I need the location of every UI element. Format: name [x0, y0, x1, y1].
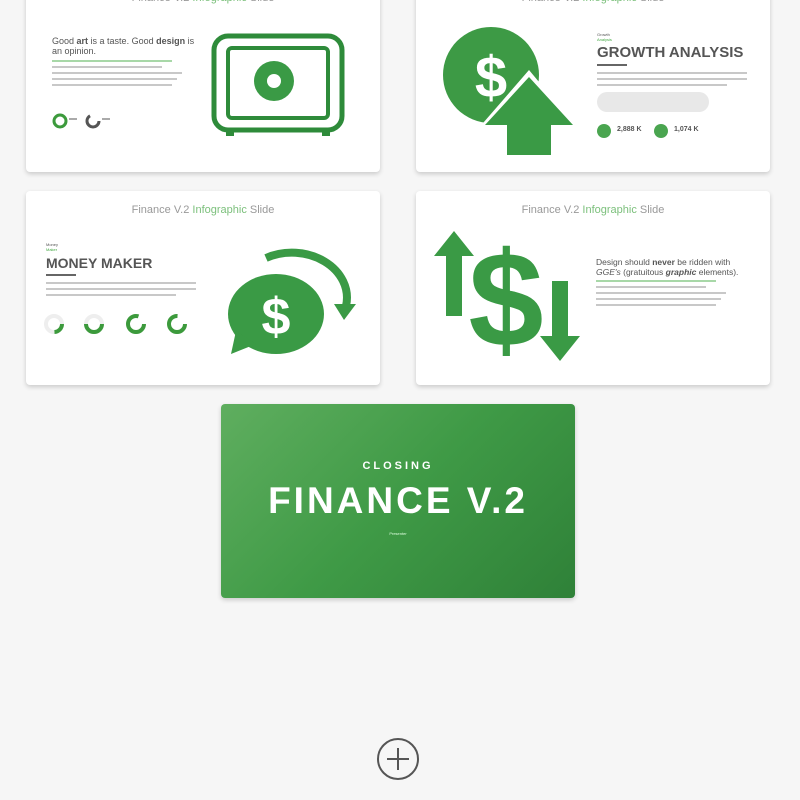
icon: safe	[212, 34, 344, 136]
icon: dollar coin with up arrow	[443, 27, 573, 155]
card: closing slide	[221, 404, 575, 598]
icon: dollar with arrows	[434, 231, 580, 371]
text: money maker: Maker	[46, 247, 57, 252]
text: growth analysis: Growth	[597, 32, 610, 37]
icon: dollar coin with up arrow: $	[475, 45, 507, 110]
text: money maker	[46, 242, 196, 296]
stats	[597, 124, 699, 138]
icon: add button	[377, 738, 419, 780]
icon: speech bubble with dollar	[228, 248, 356, 354]
stats: 1,074 K	[674, 126, 699, 133]
text: growth analysis: Analysis	[597, 37, 612, 42]
donut charts	[44, 314, 187, 334]
text: growth analysis	[597, 32, 747, 112]
closing title: FINANCE V.2	[268, 480, 528, 521]
text: money maker: MONEY MAKER	[46, 255, 152, 271]
stats: 2,888 K	[617, 126, 642, 133]
card: safe slide	[26, 0, 380, 172]
card: money maker	[26, 191, 380, 385]
text block: Design should never be ridden with GGE's (gratuitous graphic elements).	[596, 257, 738, 277]
text block: Good art is a taste. Good design is an opinion.	[52, 36, 194, 56]
donut charts	[52, 114, 110, 128]
icon: speech bubble with dollar: $	[262, 288, 291, 346]
slide title: Finance V.2 Infographic Slide	[132, 204, 274, 216]
slide title: Finance V.2 Infographic Slide	[522, 204, 664, 216]
text: money maker: Money	[46, 242, 58, 247]
closing label: CLOSING	[362, 460, 434, 472]
text: growth analysis: GROWTH ANALYSIS	[597, 44, 743, 61]
card: dollar arrows	[416, 191, 770, 385]
card: growth analysis	[416, 0, 770, 172]
presenter: Presenter	[389, 531, 407, 536]
